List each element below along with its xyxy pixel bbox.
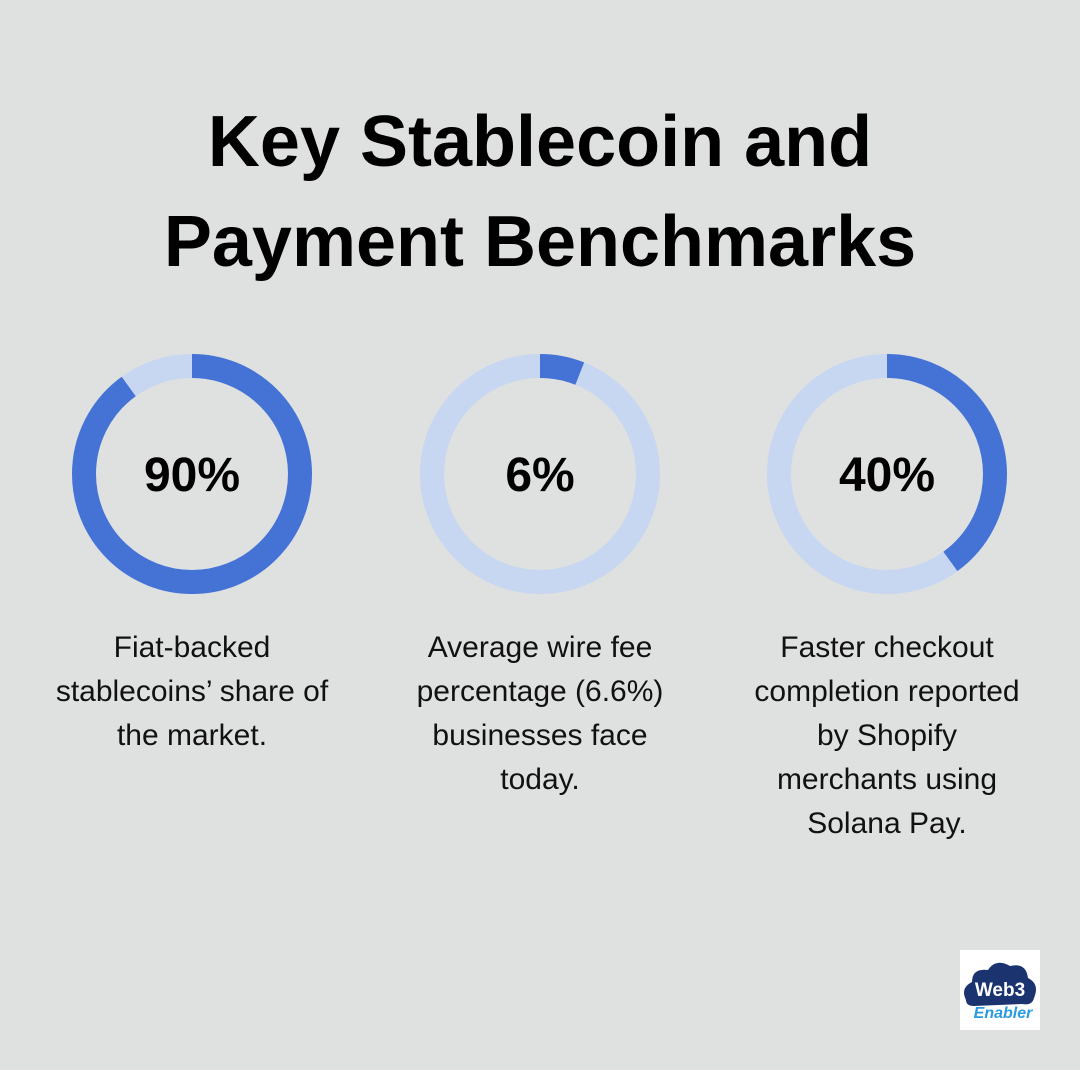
logo — [960, 950, 1040, 1030]
label: 6%: Average wire fee percentage (6.6%) businesses face today. — [417, 631, 663, 796]
title: Payment Benchmarks — [164, 202, 916, 282]
ring chart: 90%: 90% — [144, 449, 240, 502]
ring chart: 6%: 6% — [505, 449, 575, 502]
title: Key Stablecoin and — [208, 102, 872, 182]
title — [164, 102, 916, 282]
label: 40%: Faster checkout completion reported by Shopify merchants using Solana Pay. — [754, 631, 1020, 840]
ring chart: 40%: 40% — [839, 449, 935, 502]
label: 90%: Fiat-backed stablecoins’ share of the market. — [56, 631, 328, 752]
ring chart: 90% — [72, 354, 312, 594]
logo: Enabler — [974, 1005, 1033, 1022]
logo: Web3 — [975, 980, 1025, 1001]
ring chart: 6% — [420, 354, 660, 594]
ring chart: 40% — [767, 354, 1007, 594]
